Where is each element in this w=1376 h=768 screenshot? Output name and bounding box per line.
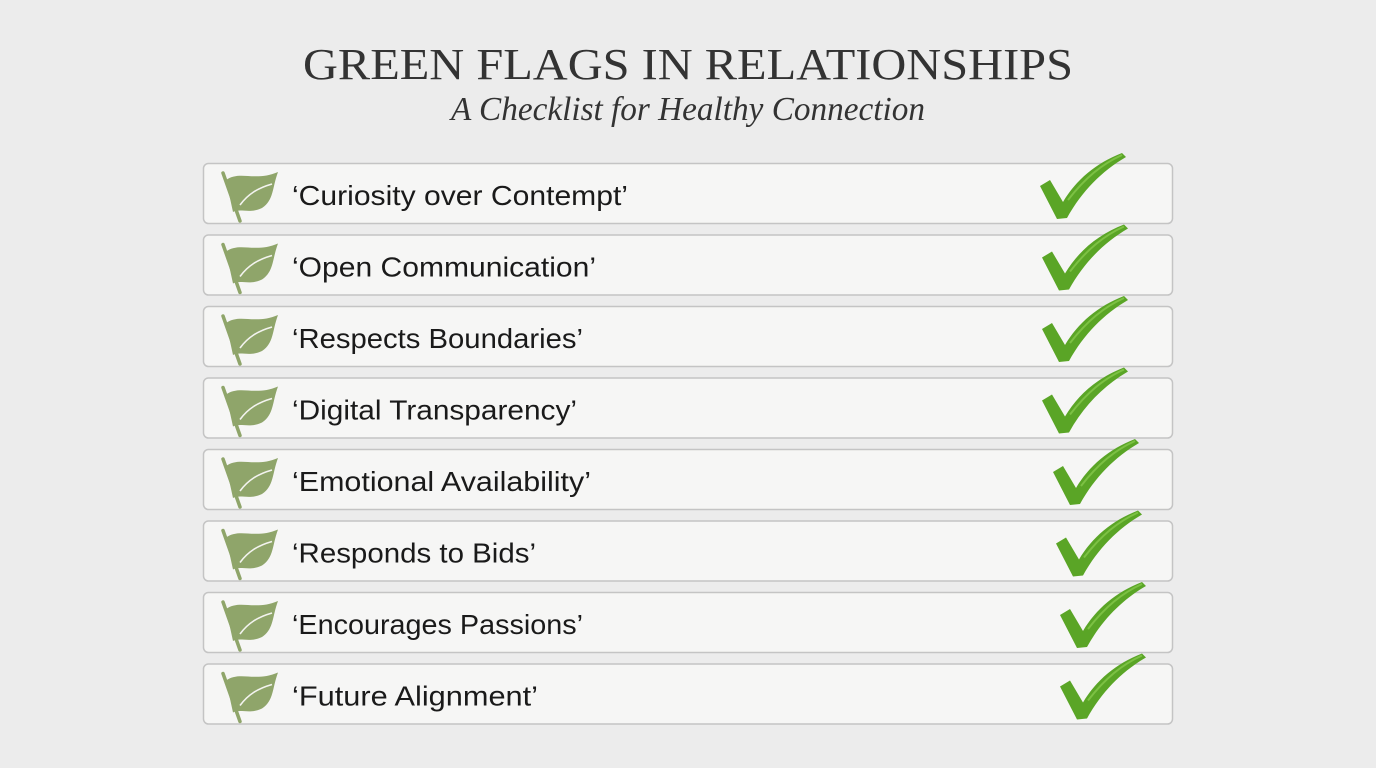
row 8 — [204, 654, 1172, 724]
row 5: ‘Emotional Availability’ — [292, 466, 591, 497]
row 6: ‘Responds to Bids’ — [292, 538, 536, 568]
row 2: ‘Open Communication’ — [292, 252, 596, 282]
row 1: ‘Curiosity over Contempt’ — [292, 180, 628, 211]
icon: check — [1040, 153, 1126, 219]
row 8: ‘Future Alignment’ — [292, 680, 538, 712]
row 4: ‘Digital Transparency’ — [292, 394, 577, 426]
row 6 — [204, 510, 1172, 581]
row 7: ‘Encourages Passions’ — [292, 609, 583, 640]
row 4 — [204, 368, 1172, 438]
row 2 — [204, 224, 1172, 295]
row 7 — [204, 582, 1172, 652]
icon: flag — [223, 172, 278, 221]
subtitle: A Checklist for Healthy Connection — [449, 91, 925, 128]
row 1 — [204, 153, 1172, 224]
row 3 — [204, 296, 1172, 366]
title: GREEN FLAGS IN RELATIONSHIPS — [303, 40, 1073, 89]
row 3: ‘Respects Boundaries’ — [292, 323, 583, 354]
row 5 — [204, 439, 1172, 510]
